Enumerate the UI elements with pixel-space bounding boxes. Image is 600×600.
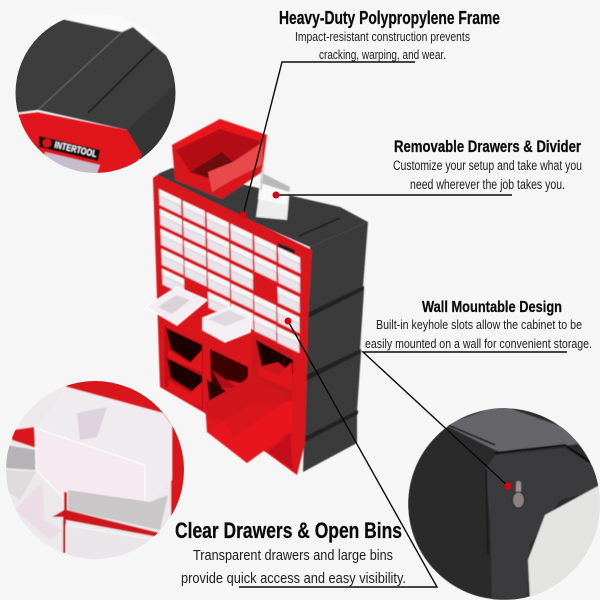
callout: clear drawers — [175, 518, 406, 587]
red frame corner — [10, 112, 142, 176]
callout: clear drawers: Clear Drawers & Open Bins — [175, 518, 402, 543]
photo: storage cabinet — [146, 119, 368, 475]
callout: frame — [279, 8, 500, 62]
top red bin — [172, 119, 267, 199]
callout: frame: cracking, warping, and wear. — [319, 47, 446, 62]
grid of clear drawers — [159, 189, 300, 353]
inset circle: keyhole close-up — [408, 405, 600, 600]
leader lines — [239, 62, 567, 587]
INTERTOOL logo — [39, 136, 100, 161]
callout: wall mount — [365, 299, 592, 351]
cabinet top surface — [153, 168, 368, 247]
callout dots — [240, 192, 512, 490]
callout: drawers — [393, 138, 582, 192]
lower open bins — [164, 326, 293, 470]
pulled out clear drawers — [146, 287, 252, 342]
cabinet black side — [303, 222, 368, 472]
callout: frame: Impact-resistant construction prevents — [295, 29, 470, 44]
callout: clear drawers: Transparent drawers and large bins — [193, 547, 393, 564]
callout: clear drawers: provide quick access and easy visibility. — [181, 570, 406, 587]
inset circle: clear drawer close-up — [6, 378, 186, 562]
removable clear drawer on top — [256, 168, 290, 220]
inset circle: frame close-up — [16, 19, 176, 173]
keyhole slot — [512, 481, 524, 508]
red front frame — [153, 175, 312, 475]
callout: frame: Heavy-Duty Polypropylene Frame — [279, 8, 500, 28]
large pulled-out red bin — [205, 375, 293, 463]
INTERTOOL logo: INTERTOOL — [53, 140, 98, 160]
callout: wall mount: Wall Mountable Design — [422, 299, 562, 316]
red divider band — [52, 492, 160, 553]
